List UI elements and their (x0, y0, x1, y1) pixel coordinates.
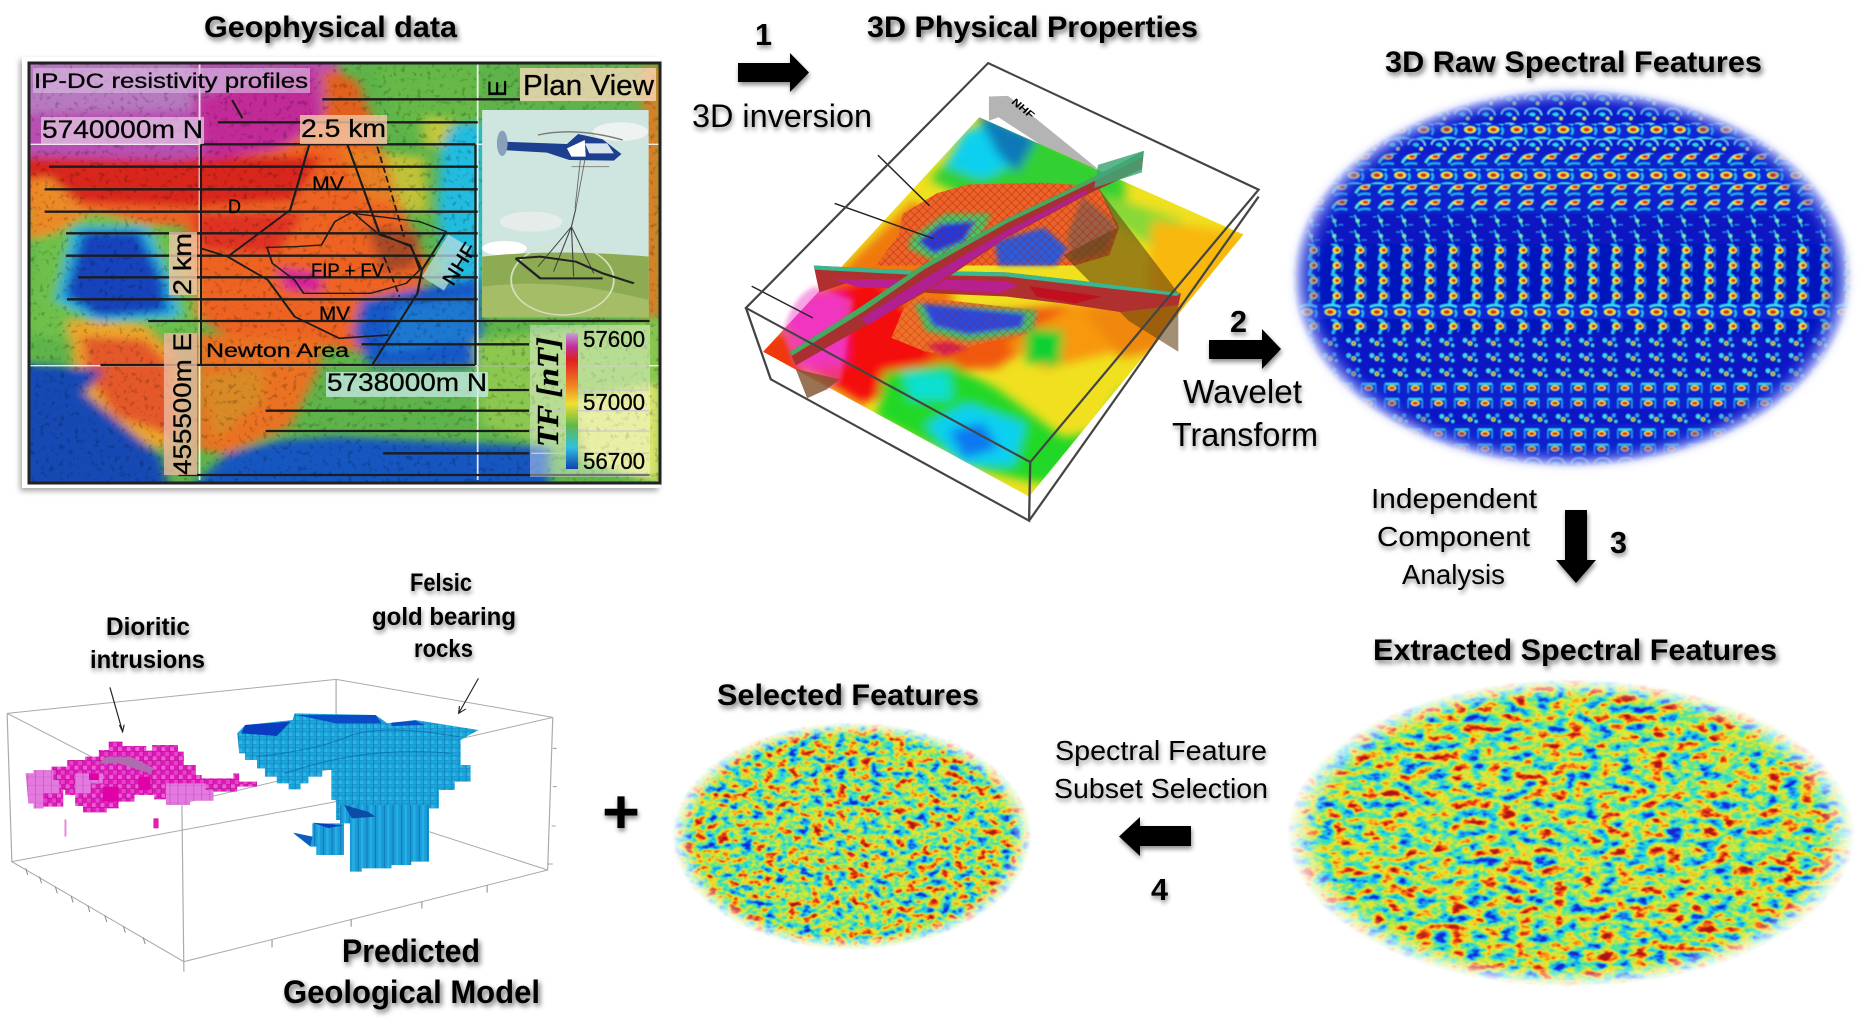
plus sign: + (602, 778, 640, 847)
map labels: 57600 (583, 326, 645, 352)
arrow 1 (738, 53, 809, 92)
title: Predicted Geological Model: Predicted (342, 933, 480, 969)
inversion section A (790, 151, 1144, 366)
pointer: Dioritic (110, 687, 124, 732)
map labels: TF [nT] (530, 337, 565, 447)
label: Wavelet Transform (1172, 373, 1318, 453)
arrow 3 (1556, 510, 1596, 583)
map labels: D (228, 197, 241, 218)
label: Felsic gold bearing rocks: Felsic (410, 569, 472, 597)
dioritic intrusion body (26, 742, 257, 837)
step 3 number: 3 (1610, 525, 1627, 560)
map labels: 2.5 km (301, 115, 386, 143)
step 4 number: 4 (1151, 872, 1169, 907)
label: Independent Component Analysis: Analysis (1402, 559, 1505, 590)
label: Dioritic intrusions (90, 613, 205, 674)
chart: 3D physical property block (738, 63, 1274, 524)
title: Geophysical data: Geophysical data (204, 11, 457, 44)
label: 3D inversion: 3D inversion (692, 98, 872, 134)
map labels: 56700 (583, 448, 645, 474)
map labels: MV (312, 174, 344, 195)
pointer: Felsic (459, 678, 478, 713)
map labels: 455500m E (169, 333, 197, 475)
panel: selected features ellipse (668, 718, 1036, 954)
panel: geophysical map (18, 57, 661, 490)
wireframe box (746, 63, 1259, 521)
label: Independent Component Analysis (1371, 483, 1537, 590)
chart: predicted geological model (7, 678, 557, 972)
map labels: 5740000m N (42, 116, 203, 144)
frame of map (29, 63, 660, 483)
map labels: Plan View (523, 70, 655, 102)
label: Independent Component Analysis: Component (1377, 521, 1530, 552)
map labels: 57000 (583, 389, 645, 415)
map labels (33, 68, 656, 475)
pointer arrows (752, 155, 933, 318)
title: Predicted Geological Model (283, 933, 540, 1010)
label: Spectral Feature Subset Selection: Spectral Feature (1055, 735, 1267, 766)
title: Selected Features: Selected Features (717, 679, 979, 712)
map labels: MV (319, 304, 350, 325)
label: Spectral Feature Subset Selection (1054, 735, 1268, 804)
map labels: IP-DC resistivity profiles (34, 70, 308, 93)
mesh body lower (891, 297, 1041, 356)
survey lines and geology contacts (29, 63, 658, 480)
label: Felsic gold bearing rocks: rocks (414, 635, 473, 663)
grey fault face NHF (989, 96, 1098, 169)
mesh body upper (876, 183, 1119, 266)
label: Felsic gold bearing rocks (372, 569, 516, 663)
title: Extracted Spectral Features: Extracted Spectral Features (1373, 634, 1777, 667)
wireframe front (12, 803, 548, 972)
coloured depth slice (763, 117, 1244, 496)
label: Dioritic intrusions: intrusions (90, 646, 205, 674)
colour bar (566, 333, 578, 469)
step 2 number: 2 (1230, 304, 1247, 339)
map labels: Newton Area (206, 341, 350, 362)
arrow 2 (1209, 329, 1281, 369)
NHF tag: NHF (1009, 97, 1036, 121)
translucent fault plane (1064, 172, 1178, 352)
axis ticks (26, 748, 557, 947)
pink mesh corner (782, 286, 853, 390)
step 1 number: 1 (755, 17, 772, 52)
label: Wavelet Transform: Wavelet (1183, 373, 1302, 410)
title: Predicted Geological Model: Geological Model (283, 974, 540, 1010)
flap below corner (796, 369, 840, 398)
magnetic field colour map (18, 57, 661, 490)
label: Spectral Feature Subset Selection: Subset Selection (1054, 773, 1268, 804)
map labels: 5738000m N (327, 369, 487, 397)
felsic gold bearing rock body (237, 713, 478, 872)
title: 3D Physical Properties: 3D Physical Properties (867, 11, 1198, 44)
legend wash (530, 325, 650, 477)
helicopter survey inset (482, 110, 649, 317)
map labels: 2 km (169, 233, 197, 295)
map labels: FIP + FV (311, 261, 384, 282)
wireframe back (7, 679, 553, 870)
panel: 3D raw spectral features ellipse (1285, 85, 1861, 477)
label: Wavelet Transform: Transform (1172, 416, 1318, 453)
panel: extracted spectral features ellipse (1285, 678, 1857, 988)
inversion section B (814, 266, 1181, 312)
title: 3D Raw Spectral Features: 3D Raw Spectral Features (1385, 46, 1762, 79)
map labels: E (484, 80, 512, 97)
label: Felsic gold bearing rocks: gold bearing (372, 603, 516, 631)
label: Dioritic intrusions: Dioritic (106, 613, 190, 641)
map labels: NHF (439, 239, 482, 290)
arrow 4 (1119, 817, 1191, 856)
label: Independent Component Analysis: Independent (1371, 483, 1537, 514)
